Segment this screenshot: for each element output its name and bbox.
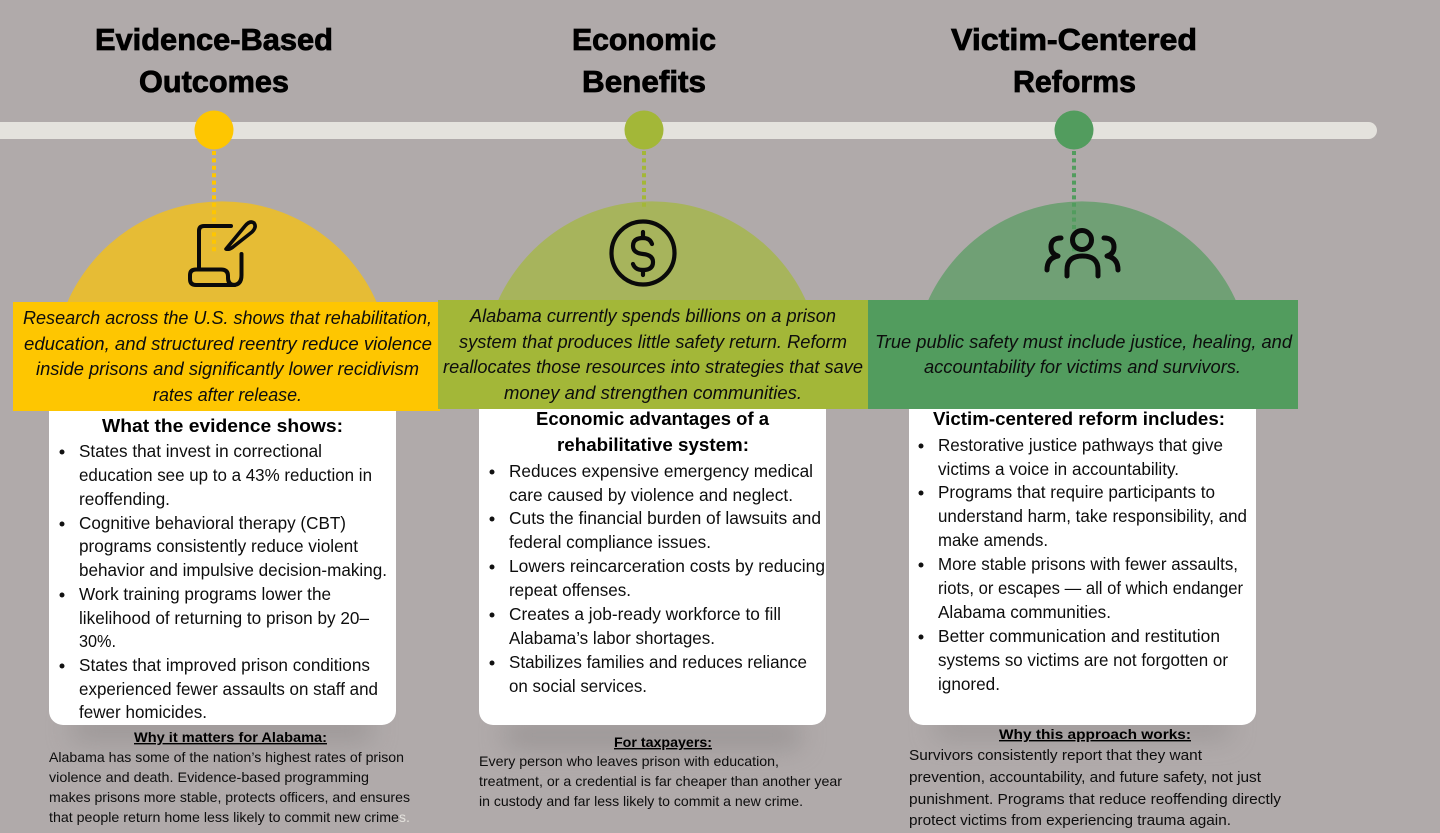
card: victim-centered reform includes: Programs that require participants to bbox=[938, 482, 1215, 502]
card: what the evidence shows: 30%. bbox=[79, 631, 116, 651]
band: research summary bbox=[13, 302, 440, 411]
card shadow bbox=[72, 715, 372, 741]
card: economic advantages: Creates a job-ready workforce to fill bbox=[509, 604, 781, 624]
card: what the evidence shows: States that improved prison conditions bbox=[79, 655, 370, 675]
timeline bar bbox=[0, 122, 1377, 139]
card: economic advantages: Stabilizes families and reduces reliance bbox=[509, 652, 807, 672]
band: research summary: education, and structured reentry reduce violence bbox=[24, 334, 432, 354]
timeline marker: olive bbox=[624, 110, 664, 150]
card: economic advantages: Cuts the financial burden of lawsuits and bbox=[509, 508, 821, 528]
card: what the evidence shows: What the evidence shows: bbox=[102, 415, 343, 436]
band: research summary: rates after release. bbox=[153, 385, 302, 405]
footer note: why it matters for Alabama: violence and death. Evidence-based programming bbox=[49, 769, 369, 785]
title: economic benefits bbox=[572, 22, 716, 99]
card: economic advantages: federal compliance issues. bbox=[509, 532, 711, 552]
card: what the evidence shows: States that invest in correctional bbox=[79, 441, 322, 461]
card: victim-centered reform includes: understand harm, take responsibility, and bbox=[938, 506, 1247, 526]
footer note: why this approach works: protect victims from experiencing trauma again. bbox=[909, 812, 1231, 829]
card shadow bbox=[505, 722, 800, 748]
title: evidence-based outcomes: Outcomes bbox=[139, 64, 289, 99]
card: what the evidence shows: experienced fewer assaults on staff and bbox=[79, 679, 378, 699]
icon: group of people bbox=[1047, 230, 1118, 276]
card: economic advantages: care caused by violence and neglect. bbox=[509, 485, 793, 505]
footer note: why this approach works: Survivors consistently report that they want bbox=[909, 747, 1203, 764]
footer note: why it matters for Alabama: makes prisons more stable, protects officers, and ensures bbox=[49, 789, 410, 805]
title: evidence-based outcomes: Evidence-Based bbox=[95, 22, 333, 57]
title: economic benefits: Economic bbox=[572, 22, 716, 57]
card: what the evidence shows: education see up to a 43% reduction in bbox=[79, 465, 372, 485]
card shadow bbox=[935, 714, 1230, 738]
column: economic benefits bbox=[438, 22, 869, 809]
card: victim-centered reform includes: make amends. bbox=[938, 530, 1048, 550]
footer note: why it matters for Alabama: Alabama has some of the nation’s highest rates of prison bbox=[49, 749, 404, 765]
card: what the evidence shows: behavior and impulsive decision-making. bbox=[79, 560, 387, 580]
timeline marker: green bbox=[1054, 110, 1094, 150]
footer note: for taxpayers: Every person who leaves prison with education, bbox=[479, 753, 779, 769]
card: economic advantages: Lowers reincarceration costs by reducing bbox=[509, 556, 825, 576]
card: economic advantages: Alabama’s labor shortages. bbox=[509, 628, 715, 648]
dotted connector: olive bbox=[642, 151, 646, 208]
card: victim-centered reform includes: Alabama communities. bbox=[938, 602, 1111, 622]
footer note: for taxpayers: in custody and far less likely to commit a new crime. bbox=[479, 793, 803, 809]
card: economic advantages: Reduces expensive emergency medical bbox=[509, 461, 813, 481]
card: what the evidence shows: Cognitive behavioral therapy (CBT) bbox=[79, 513, 346, 533]
footer note: why it matters for Alabama: that people return home less likely to commit new crime s. bbox=[49, 809, 410, 825]
card: what the evidence shows: fewer homicides. bbox=[79, 702, 207, 722]
card: what the evidence shows bbox=[49, 411, 396, 725]
card: what the evidence shows: programs consistently reduce violent bbox=[79, 536, 358, 556]
icon: dollar coin bbox=[612, 222, 674, 284]
card: economic advantages bbox=[479, 408, 826, 725]
title: victim-centered reforms: Reforms bbox=[1013, 64, 1136, 99]
footer note: for taxpayers bbox=[479, 734, 842, 809]
band: public safety summary bbox=[868, 300, 1298, 409]
band: research summary: inside prisons and significantly lower recidivism bbox=[36, 359, 419, 379]
column: victim-centered reforms bbox=[868, 22, 1298, 829]
footer note: why this approach works: punishment. Programs that reduce reoffending directly bbox=[909, 791, 1282, 808]
card: economic advantages: on social services. bbox=[509, 676, 647, 696]
card: victim-centered reform includes: victims a voice in accountability. bbox=[938, 459, 1179, 479]
footer note: for taxpayers: treatment, or a credential is far cheaper than another year bbox=[479, 773, 842, 789]
card: victim-centered reform includes: systems so victims are not forgotten or bbox=[938, 650, 1228, 670]
card: economic advantages: Economic advantages of a bbox=[536, 408, 770, 429]
band: research summary: Research across the U.S. shows that rehabilitation, bbox=[23, 308, 432, 328]
card: victim-centered reform includes: riots, or escapes — all of which endanger bbox=[938, 578, 1243, 598]
footer note: why it matters for Alabama: Why it matters for Alabama: bbox=[134, 729, 327, 745]
footer note: why this approach works bbox=[909, 726, 1282, 829]
arch: yellow bbox=[67, 201, 377, 303]
band: public safety summary: accountability for victims and survivors. bbox=[924, 357, 1241, 377]
card: victim-centered reform includes bbox=[909, 408, 1256, 725]
card: what the evidence shows: Work training programs lower the bbox=[79, 584, 331, 604]
band: spending summary: money and strengthen communities. bbox=[504, 383, 802, 403]
dotted connector: green bbox=[1072, 151, 1076, 254]
footer note: for taxpayers: For taxpayers: bbox=[614, 734, 712, 750]
dotted connector: yellow bbox=[212, 151, 216, 254]
band: spending summary bbox=[438, 300, 869, 409]
card: victim-centered reform includes: Better communication and restitution bbox=[938, 626, 1220, 646]
band: spending summary: system that produces little safety return. Reform bbox=[459, 332, 847, 352]
arch: olive bbox=[497, 201, 807, 303]
title: economic benefits: Benefits bbox=[582, 64, 706, 99]
card: victim-centered reform includes: More stable prisons with fewer assaults, bbox=[938, 554, 1238, 574]
card: victim-centered reform includes: Victim-centered reform includes: bbox=[933, 408, 1225, 429]
card: what the evidence shows: reoffending. bbox=[79, 489, 170, 509]
footer note: why this approach works: prevention, accountability, and future safety, not just bbox=[909, 769, 1262, 786]
footer note: why this approach works: Why this approach works: bbox=[999, 726, 1191, 742]
timeline marker: yellow bbox=[194, 110, 234, 150]
card: economic advantages: rehabilitative system: bbox=[557, 434, 749, 455]
band: spending summary: Alabama currently spends billions on a prison bbox=[469, 306, 836, 326]
band: public safety summary: True public safety must include justice, healing, and bbox=[875, 332, 1293, 352]
card: economic advantages: repeat offenses. bbox=[509, 580, 631, 600]
title: victim-centered reforms: Victim-Centered bbox=[951, 22, 1197, 57]
card: victim-centered reform includes: ignored. bbox=[938, 674, 1000, 694]
arch: green bbox=[927, 201, 1237, 303]
card: victim-centered reform includes: Restorative justice pathways that give bbox=[938, 435, 1223, 455]
title: evidence-based outcomes bbox=[95, 22, 333, 99]
band: spending summary: reallocates those resources into strategies that save bbox=[443, 357, 863, 377]
icon: scroll and pen bbox=[190, 222, 255, 285]
column: evidence-based outcomes bbox=[13, 22, 440, 825]
footer note: why it matters for Alabama bbox=[49, 729, 410, 825]
title: victim-centered reforms bbox=[951, 22, 1197, 99]
card: what the evidence shows: likelihood of returning to prison by 20– bbox=[79, 608, 369, 628]
